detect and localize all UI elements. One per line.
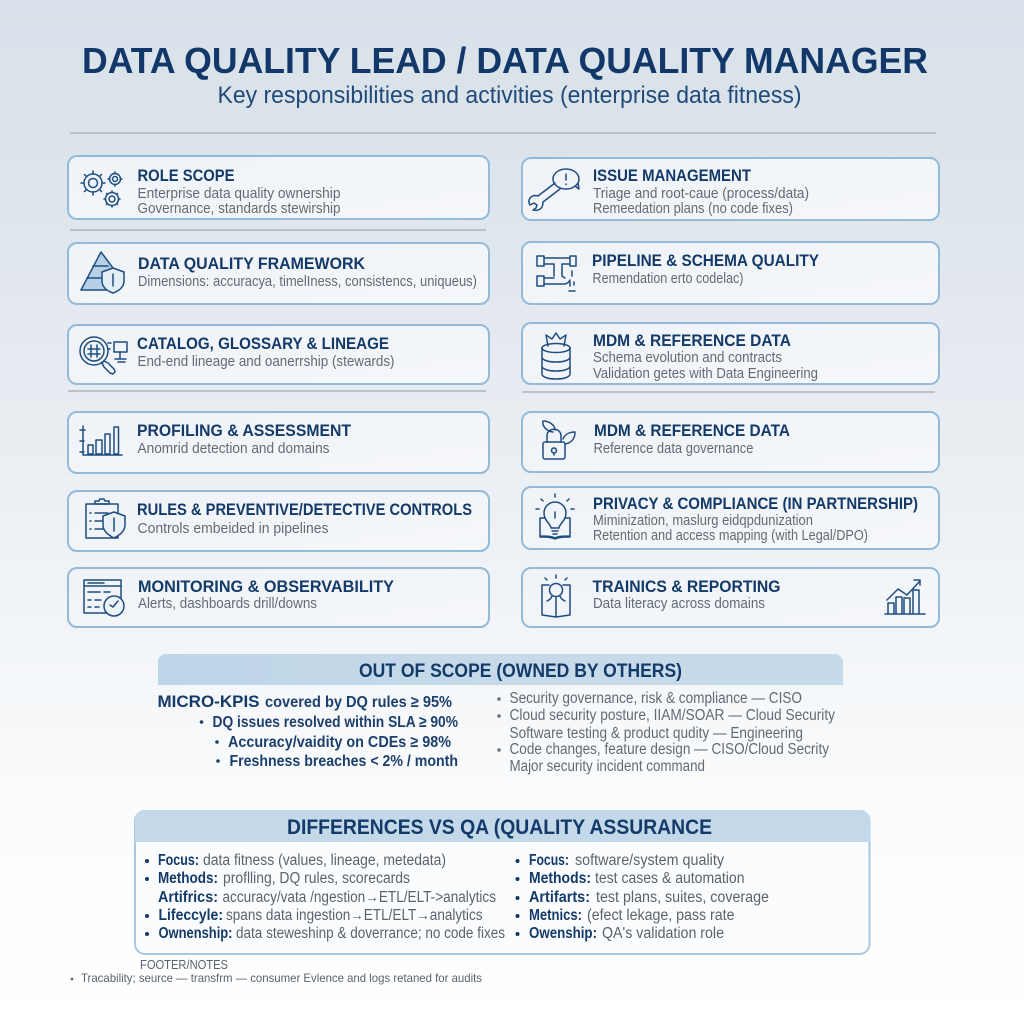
- heading: MDM & REFERENCE DATA: [594, 421, 790, 440]
- text: Controls embeided in pipelines: [138, 521, 328, 537]
- footer note: Tracability; seurce — transfrm — consumer Evlence and logs retaned for audits: [81, 971, 482, 985]
- icon: book and bulb: [542, 575, 570, 617]
- panel: mdm and reference data (schema): [522, 323, 939, 384]
- quality assurance column: (efect lekage, pass rate: [587, 907, 734, 924]
- footer heading: FOOTER/NOTES: [140, 958, 228, 972]
- data quality column: Focus:: [158, 852, 199, 869]
- out of scope list: Major security incident command: [510, 758, 705, 775]
- panel: pipeline and schema quality: [522, 242, 939, 304]
- panel: mdm and reference data (governance): [522, 412, 939, 472]
- micro-kpi list: MICRO-KPIS: [158, 692, 260, 711]
- quality assurance column: software/system quality: [575, 852, 724, 869]
- quality assurance column: test plans, suites, coverage: [596, 889, 769, 906]
- out of scope list: Code changes, feature design — CISO/Cloud Secrity: [510, 741, 829, 758]
- heading: DATA QUALITY FRAMEWORK: [138, 254, 366, 273]
- text: Governance, standards stewirship: [138, 201, 340, 217]
- data quality column: data fitness (values, lineage, metedata): [203, 852, 446, 869]
- text: Reference data governance: [594, 441, 754, 457]
- heading: ISSUE MANAGEMENT: [593, 166, 752, 185]
- heading band: DIFFERENCES VS QA (QUALITY ASSURANCE: [287, 816, 712, 839]
- text: Anomrid detection and domains: [138, 441, 330, 457]
- text: Retention and access mapping (with Legal/DPO): [593, 528, 868, 544]
- data quality column: proflling, DQ rules, scorecards: [223, 870, 410, 887]
- quality assurance column: QA's validation role: [602, 925, 724, 942]
- micro-kpi list: Freshness breaches < 2% / month: [230, 753, 458, 770]
- panel: monitoring and observability: [68, 568, 489, 627]
- icon: clipboard and shield: [86, 499, 125, 538]
- quality assurance column: Owenship:: [529, 925, 597, 942]
- panel: rules and controls: [68, 491, 489, 551]
- icon: wrench and speech bubble: [529, 169, 579, 210]
- data quality column: data steweshinp & doverrance; no code fixes: [236, 925, 505, 942]
- out of scope list: [497, 690, 835, 775]
- data quality column: Lifeccyle:: [158, 907, 223, 924]
- icon: bar chart: [80, 426, 122, 455]
- heading band: [135, 810, 870, 842]
- text: Validation getes with Data Engineering: [593, 366, 818, 382]
- quality assurance column: [516, 852, 769, 942]
- icon: rising chart: [885, 580, 925, 614]
- icon: database with crown: [542, 333, 570, 379]
- text: Enterprise data quality ownership: [138, 186, 340, 202]
- text: Miminization, maslurg eidqpdunization: [593, 513, 813, 529]
- quality assurance column: Metnics:: [529, 907, 582, 924]
- heading: CATALOG, GLOSSARY & LINEAGE: [137, 334, 389, 353]
- text: Remeedation plans (no code fixes): [593, 201, 793, 217]
- icon: pipes: [537, 256, 576, 291]
- data quality column: [145, 852, 505, 942]
- text: Schema evolution and contracts: [593, 350, 782, 366]
- heading: PIPELINE & SCHEMA QUALITY: [592, 251, 820, 270]
- panel: catalog, glossary and lineage: [68, 325, 489, 384]
- quality assurance column: test cases & automation: [595, 870, 744, 887]
- out of scope list: Cloud security posture, IIAM/SOAR — Cloud Security: [510, 707, 835, 724]
- heading: MONITORING & OBSERVABILITY: [138, 577, 395, 596]
- panel: issue management: [522, 158, 939, 220]
- data quality column: Methods:: [158, 870, 218, 887]
- quality assurance column: Methods:: [529, 870, 591, 887]
- heading: PROFILING & ASSESSMENT: [137, 421, 352, 440]
- data quality column: Ownenship:: [158, 925, 232, 942]
- heading: TRAINICS & REPORTING: [592, 577, 780, 596]
- text: Data literacy across domains: [593, 596, 765, 612]
- heading band: [158, 654, 843, 685]
- subtitle: Key responsibilities and activities (enterprise data fitness): [218, 82, 802, 109]
- panel: privacy and compliance: [522, 487, 939, 549]
- panel: profiling and assessment: [68, 412, 489, 473]
- heading: RULES & PREVENTIVE/DETECTIVE CONTROLS: [137, 500, 472, 519]
- panel: training and reporting: [522, 568, 939, 627]
- icon: pyramid and shield: [81, 252, 124, 293]
- text: Remendation erto codelac): [592, 271, 744, 287]
- quality assurance column: Focus:: [529, 852, 569, 869]
- out of scope list: Software testing & product qudity — Engineering: [510, 725, 803, 742]
- heading band: OUT OF SCOPE (OWNED BY OTHERS): [359, 660, 682, 682]
- title: DATA QUALITY LEAD / DATA QUALITY MANAGER: [82, 40, 928, 81]
- text: End-end lineage and oanerrship (stewards): [138, 354, 394, 370]
- text: Dimensions: accuracya, timelIness, consistencs, uniqueus): [138, 274, 477, 290]
- icon: magnifier and node: [80, 337, 127, 374]
- data quality column: accuracy/vata /ngestion→ETL/ELT->analytics: [222, 889, 496, 906]
- panel: data quality framework: [68, 243, 489, 304]
- quality assurance column: Artifarts:: [529, 889, 590, 906]
- micro-kpi list: Accuracy/vaidity on CDEs ≥ 98%: [228, 734, 451, 751]
- icon: gears: [81, 171, 122, 207]
- icon: dashboard and clock: [84, 580, 124, 616]
- heading: ROLE SCOPE: [138, 166, 234, 185]
- text: Triage and root-caue (process/data): [593, 186, 809, 202]
- micro-kpi list: DQ issues resolved within SLA ≥ 90%: [212, 714, 458, 731]
- heading: PRIVACY & COMPLIANCE (IN PARTNERSHIP): [593, 494, 918, 513]
- out of scope list: Security governance, risk & compliance — CISO: [510, 690, 802, 707]
- icon: lock with leaves: [543, 421, 575, 459]
- micro-kpi list: [158, 692, 458, 770]
- panel: differences vs qa: [135, 810, 870, 954]
- data quality column: spans data ingestion→ETL/ELT→analytics: [226, 907, 483, 924]
- panel: role scope: [68, 156, 489, 219]
- panel: out of scope: [158, 654, 843, 775]
- heading: MDM & REFERENCE DATA: [593, 331, 791, 350]
- data quality column: Artifrics:: [158, 889, 218, 906]
- icon: light bulb and book: [536, 494, 574, 539]
- micro-kpi list: covered by DQ rules ≥ 95%: [265, 694, 452, 711]
- text: Alerts, dashboards drill/downs: [138, 596, 317, 612]
